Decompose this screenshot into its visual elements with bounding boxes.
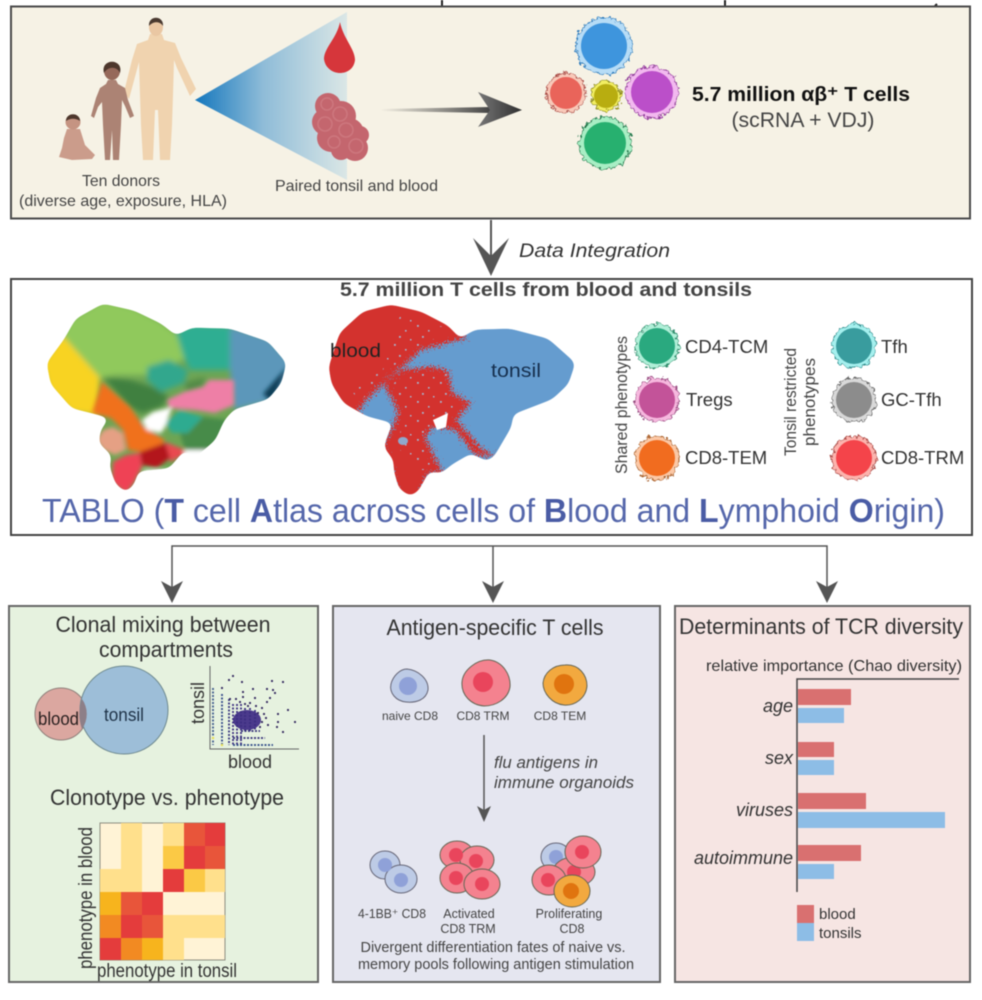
icon: naive CD8 <box>382 669 438 723</box>
text: tonsil restricted axis: Tonsil restricted <box>781 348 800 456</box>
text: cell count <box>692 84 910 132</box>
legend: CD8-TEM <box>635 436 767 480</box>
icon: activated TRM cells: Activated <box>443 907 495 921</box>
legend: CD8-TEM: CD8-TEM <box>685 447 767 468</box>
icon: CD8 TEM <box>534 665 587 723</box>
arrow: stimulation <box>477 735 491 822</box>
text: data integration: Data Integration <box>519 241 670 262</box>
chart: relative importance bars: age <box>763 696 793 716</box>
text: cell count: 5.7 million αβ⁺ T cells <box>692 84 910 106</box>
legend: Tregs: Tregs <box>686 389 733 410</box>
icon: blood drop <box>324 22 355 73</box>
text: donors <box>19 173 227 210</box>
panel: antigen-specific T cells <box>333 606 660 982</box>
icon: proliferating cells: CD8 <box>559 922 585 936</box>
text: shared phenotypes axis: Shared phenotypes <box>612 336 631 474</box>
chart: relative importance bars: autoimmune <box>694 848 793 868</box>
heading: antigen-specific: Antigen-specific T cells <box>386 615 604 640</box>
label: heatmap x axis: phenotype in tonsil <box>97 961 237 982</box>
icon: 4-1BB cells: 4-1BB⁺ CD8 <box>358 907 426 921</box>
icon: child donor <box>91 62 134 160</box>
chart: venn diagram <box>35 666 168 754</box>
text: cell count: (scRNA + VDJ) <box>732 108 874 132</box>
chart: relative importance bars: sex <box>765 748 794 768</box>
title: TABLO: TABLO (T cell Atlas across cells of Blood and Lymphoid Origin) <box>42 492 945 529</box>
heading: clonal mixing <box>56 612 270 662</box>
legend: tissue <box>797 905 862 942</box>
icon: activated TRM cells: CD8 TRM <box>440 922 496 936</box>
legend: CD4-TCM: CD4-TCM <box>685 336 768 357</box>
chart: phenotype UMAP <box>40 300 292 495</box>
heading: clonal mixing: Clonal mixing between <box>56 612 270 637</box>
chart: tissue UMAP <box>328 304 574 496</box>
legend: CD4-TCM <box>635 324 768 368</box>
icon: adult donor <box>124 18 196 160</box>
text: donors: Ten donors <box>82 173 160 190</box>
icon: proliferating cells: Proliferating <box>536 907 602 921</box>
label: tonsil: tonsil <box>491 361 541 382</box>
legend: CD8-TRM: CD8-TRM <box>881 447 964 468</box>
text: flu antigens: immune organoids <box>494 773 634 792</box>
icon: tissue sampling cone <box>195 12 347 180</box>
icon: 4-1BB cells <box>358 851 426 921</box>
icon: proliferating cells <box>532 836 602 936</box>
heading: atlas: 5.7 million T cells from blood and tonsils <box>340 279 752 301</box>
heading: clonal mixing: compartments <box>99 637 233 662</box>
label: chart title: relative importance (Chao diversity) <box>706 658 962 675</box>
clipped title descenders <box>442 0 937 7</box>
panel: atlas <box>11 279 972 535</box>
label: heatmap y axis: phenotype in blood <box>76 827 97 969</box>
panel: TCR diversity <box>675 606 970 982</box>
icon: CD8 TEM: CD8 TEM <box>534 709 586 723</box>
chart: clone scatter: blood <box>228 752 272 772</box>
panel: clonal mixing <box>9 606 318 982</box>
icon: activated TRM cells <box>440 841 500 936</box>
chart: clone scatter <box>188 666 299 772</box>
heading: clonotype vs phenotype: Clonotype vs. phenotype <box>50 785 284 810</box>
chart: clone scatter: tonsil <box>188 682 208 724</box>
panel: sampling <box>11 6 970 218</box>
icon: CD8 TRM: CD8 TRM <box>456 709 510 723</box>
icon: baby donor <box>59 114 95 160</box>
legend: tissue: tonsils <box>819 925 862 942</box>
icon: CD8 TRM <box>456 660 510 723</box>
chart: venn diagram: tonsil <box>104 705 144 725</box>
chart: relative importance bars <box>694 679 959 892</box>
legend: CD8-TRM <box>832 436 964 480</box>
chart: relative importance bars: viruses <box>736 800 793 820</box>
legend: GC-Tfh <box>832 378 942 422</box>
legend: Tregs <box>635 378 733 422</box>
icon: naive CD8: naive CD8 <box>382 709 438 723</box>
icon: T cell cluster <box>546 18 678 169</box>
text: tissue label: Paired tonsil and blood <box>275 178 438 195</box>
label: blood: blood <box>330 341 381 362</box>
chart: venn diagram: blood <box>38 709 79 729</box>
chart: phenotype heatmap <box>100 823 225 960</box>
text: flu antigens <box>494 753 634 792</box>
arrows: three branches <box>161 546 838 603</box>
arrow: sampling to cells <box>381 92 522 127</box>
legend: GC-Tfh: GC-Tfh <box>881 389 942 410</box>
text: donors: (diverse age, exposure, HLA) <box>19 193 227 210</box>
text: panel conclusion <box>358 939 634 973</box>
text: tonsil restricted axis: phenotypes <box>800 358 819 446</box>
legend: tissue: blood <box>819 906 856 923</box>
legend: Tfh <box>832 324 908 368</box>
text: panel conclusion: memory pools following antigen stimulation <box>358 956 634 973</box>
heading: TCR diversity: Determinants of TCR diversity <box>679 614 964 639</box>
icon: tonsil <box>312 93 369 161</box>
legend: Tfh: Tfh <box>881 336 908 357</box>
text: tonsil restricted axis <box>781 348 819 456</box>
text: flu antigens: flu antigens in <box>494 753 598 772</box>
text: panel conclusion: Divergent differentiation fates of naive vs. <box>360 939 626 956</box>
arrow: data integration <box>473 220 509 276</box>
